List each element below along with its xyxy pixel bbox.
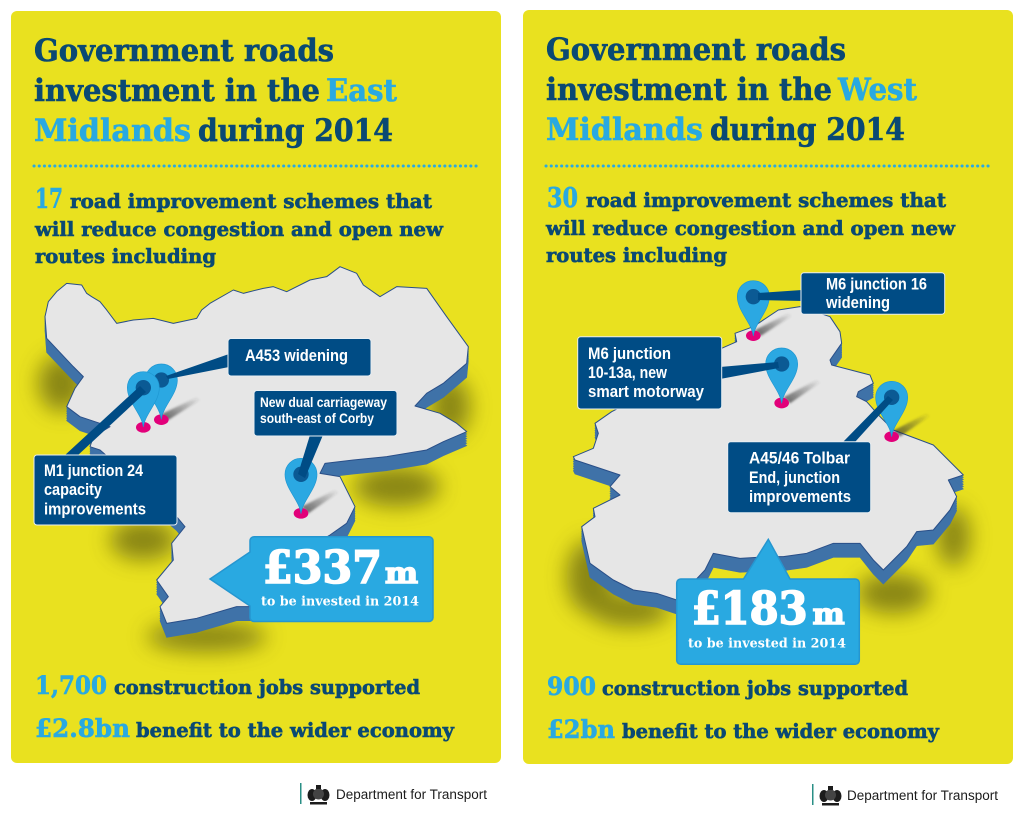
intro text: East: road improvement schemes that — [70, 189, 433, 213]
stat: construction jobs East: 1,700 — [35, 671, 107, 700]
callout: £183m investment — [677, 539, 859, 664]
callout: M6 junction 16 widening: widening — [825, 294, 890, 312]
title: West Midlands: investment in the — [546, 72, 832, 108]
callout: A45/46 Tolbar End: End, junction — [749, 469, 840, 487]
intro text: East: will reduce congestion and open new — [34, 217, 444, 241]
callout: M6 junction 10-13a: M6 junction — [588, 345, 671, 363]
map: West Midlands — [567, 307, 970, 627]
logo: Department for Transport (East) — [300, 783, 487, 804]
callout: £183m investment: £183 — [692, 582, 808, 635]
title: West Midlands — [546, 32, 918, 148]
stat: construction jobs East: construction jobs supported — [114, 675, 420, 699]
pin: M6 junction 10-13a — [766, 348, 820, 408]
callout: M6 junction 16 widening — [758, 273, 945, 314]
callout: M6 junction 10-13a: smart motorway — [588, 383, 705, 401]
intro text: West — [545, 183, 956, 267]
callout: £183m investment: to be invested in 2014 — [688, 637, 846, 652]
callout: M1 junction 24: improvements — [44, 500, 146, 518]
stat: construction jobs West — [547, 672, 908, 701]
pin: M1 — [127, 372, 159, 433]
stat: economic benefit East — [35, 714, 455, 743]
stat: economic benefit West: benefit to the wider economy — [622, 719, 940, 743]
pin: A453 — [145, 364, 200, 425]
title: East Midlands: Government roads — [34, 33, 334, 69]
stat: construction jobs West: construction jobs supported — [602, 676, 908, 700]
pin: Corby — [285, 458, 338, 519]
title: West Midlands: during 2014 — [710, 112, 905, 148]
pin: A45/46 Tolbar End — [876, 381, 930, 442]
intro text: East: 17 — [35, 184, 63, 215]
stat: economic benefit West — [547, 715, 940, 744]
callout: £183m investment: m — [813, 597, 845, 631]
callout: M6 junction 10-13a: 10-13a, new — [588, 364, 667, 382]
title: West Midlands: Government roads — [546, 32, 846, 68]
title: West Midlands: Midlands — [546, 112, 703, 148]
stat: construction jobs East — [35, 671, 420, 700]
icon: crest — [820, 786, 842, 806]
logo: Department for Transport (West) — [812, 784, 998, 806]
callout: A45/46 Tolbar End — [728, 396, 893, 513]
logo: Department for Transport (West): Department for Transport — [847, 788, 998, 803]
callout: Corby dual carriageway: New dual carriageway — [260, 394, 387, 410]
callout: M1 junction 24: M1 junction 24 — [44, 462, 144, 480]
title: East Midlands: East — [326, 73, 398, 109]
logo: Department for Transport (East): Department for Transport — [336, 787, 487, 802]
stat: economic benefit East: £2.8bn — [35, 714, 130, 743]
callout: £337m investment: to be invested in 2014 — [261, 594, 419, 610]
title: West Midlands: West — [837, 72, 918, 108]
stat: construction jobs West: 900 — [547, 672, 596, 701]
intro text: East: routes including — [35, 244, 216, 268]
title: East Midlands: investment in the — [34, 73, 320, 109]
title: East Midlands: Midlands — [34, 113, 191, 149]
title: East Midlands: during 2014 — [198, 113, 393, 149]
callout: Corby dual carriageway — [254, 390, 397, 478]
intro text: East — [34, 184, 444, 268]
callout: A45/46 Tolbar End: A45/46 Tolbar — [749, 450, 851, 468]
pin: M6 junction 16 — [737, 281, 792, 341]
callout: £337m investment: £337 — [263, 541, 382, 594]
callout: £337m investment: m — [385, 556, 418, 590]
icon: crest — [308, 785, 330, 804]
stat: economic benefit West: £2bn — [547, 715, 615, 744]
callout: Corby dual carriageway: south-east of Corby — [260, 410, 374, 426]
panel: East Midlands — [11, 11, 501, 763]
title: East Midlands — [34, 33, 398, 149]
stat: economic benefit East: benefit to the wider economy — [136, 718, 455, 742]
intro text: West: will reduce congestion and open new — [545, 216, 956, 240]
map: East Midlands — [38, 267, 470, 652]
panel: West Midlands — [523, 10, 1013, 764]
callout: A453 widening: A453 widening — [245, 347, 348, 365]
callout: M6 junction 10-13a — [578, 337, 779, 409]
callout: £337m investment — [210, 537, 433, 622]
callout: M6 junction 16 widening: M6 junction 16 — [826, 276, 927, 294]
intro text: West: road improvement schemes that — [586, 188, 947, 212]
callout: M1 junction 24 — [34, 386, 177, 525]
intro text: West: routes including — [546, 243, 727, 267]
callout: M1 junction 24: capacity — [44, 481, 103, 499]
intro text: West: 30 — [547, 183, 578, 214]
callout: A45/46 Tolbar End: improvements — [749, 488, 851, 506]
callout: A453 widening — [166, 338, 371, 379]
